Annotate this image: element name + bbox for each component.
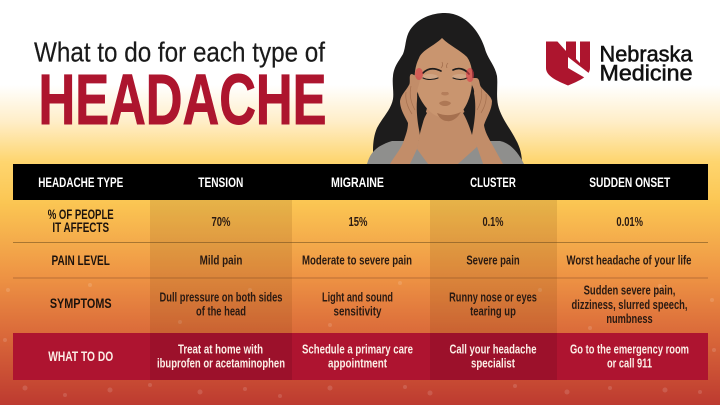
row: what to do: Treat at home with: [178, 343, 263, 357]
row: symptoms: Dull pressure on both sides: [160, 290, 283, 304]
row: symptoms: Light and sound: [322, 290, 393, 304]
row: pain level: Severe pain: [466, 254, 520, 268]
header row: SUDDEN ONSET: [589, 175, 671, 190]
row: pain level: [52, 253, 692, 268]
row: what to do: appointment: [328, 357, 388, 371]
row: percent of people affected: 70%: [212, 215, 230, 229]
pain marks at temples: [415, 68, 474, 82]
row: percent of people affected: 0.1%: [482, 215, 504, 229]
row dividers: [13, 242, 708, 278]
eyelids: [422, 74, 468, 80]
row: symptoms: Runny nose or eyes: [449, 290, 537, 304]
header row: TENSION: [198, 175, 243, 190]
row: percent of people affected: 15%: [348, 215, 368, 229]
row: pain level: Moderate to severe pain: [302, 254, 412, 268]
neck and chest: [417, 108, 477, 164]
row: symptoms: SYMPTOMS: [50, 296, 112, 311]
hair strands beside the jaw: [417, 93, 475, 135]
forehead wrinkle: [441, 62, 448, 68]
logo: Nebraska Medicine: Medicine: [600, 60, 692, 86]
header row: [13, 164, 708, 200]
row: percent of people affected: % OF PEOPLE: [48, 207, 114, 222]
header row: CLUSTER: [470, 175, 516, 190]
gray shirt neckline: [410, 147, 483, 164]
face: [415, 38, 472, 119]
illustration: woman with headache: [367, 13, 524, 164]
row: what to do: specialist: [471, 357, 516, 371]
row: what to do: Call your headache: [450, 343, 537, 357]
row: what to do: ibuprofen or acetaminophen: [157, 357, 285, 371]
row: percent of people affected: 0.01%: [616, 215, 643, 229]
right hand and arm: [470, 78, 503, 164]
row: symptoms: tearing up: [470, 305, 516, 319]
row: pain level: PAIN LEVEL: [52, 253, 110, 268]
hair: [373, 13, 522, 164]
title: [34, 36, 326, 140]
eyebrows and eyes: [423, 69, 469, 80]
row: what to do: Schedule a primary care: [302, 343, 413, 357]
row: what to do: [13, 333, 708, 380]
title line: what to do: What to do for each type of: [34, 36, 325, 68]
row: pain level: Mild pain: [200, 254, 242, 268]
logo shield: [546, 42, 590, 86]
header row: HEADACHE TYPE: [38, 175, 123, 190]
left hand and arm: [390, 74, 420, 164]
finger lines: [406, 86, 486, 114]
row: symptoms: sensitivity: [334, 305, 382, 319]
comparison table: [13, 164, 708, 380]
shaded columns: [150, 200, 557, 333]
header row: MIGRAINE: [331, 175, 384, 190]
logo: Nebraska Medicine: [546, 41, 693, 86]
row: what to do: WHAT TO DO: [48, 349, 113, 364]
title word: headache: HEADACHE: [38, 61, 326, 140]
row: symptoms: Sudden severe pain,: [584, 284, 675, 298]
shirt: [367, 141, 524, 164]
row: percent of people affected: IT AFFECTS: [52, 220, 109, 235]
jaw shadow: [437, 112, 461, 121]
logo N cutouts: [557, 41, 590, 79]
row: symptoms: [50, 284, 688, 326]
row: what to do: or call 911: [607, 357, 652, 371]
row: symptoms: of the head: [196, 305, 246, 319]
nose and mouth: [439, 92, 451, 106]
row: percent of people affected: [48, 207, 643, 235]
logo wordmark: Nebraska: [600, 42, 693, 66]
row: symptoms: numbness: [606, 312, 653, 326]
